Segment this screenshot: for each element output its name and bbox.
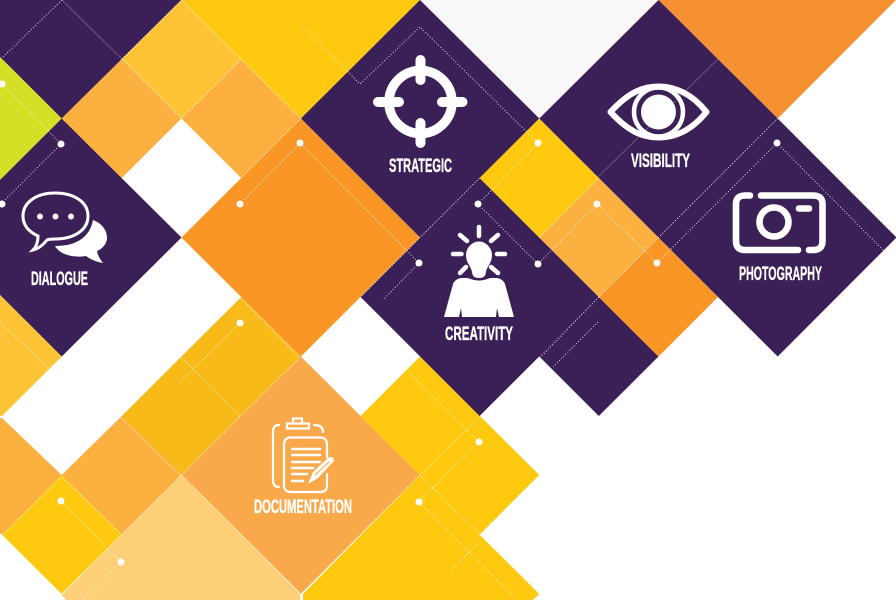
panel: lime diamond	[0, 57, 62, 180]
panel: left yellow	[0, 295, 62, 416]
panel: amber diamond left	[62, 59, 182, 178]
panel: light yellow diamond	[122, 0, 241, 118]
panel: top left purple	[0, 0, 182, 118]
panel: top yellow band	[182, 0, 420, 118]
label: creativity: CREATIVITY	[445, 324, 513, 345]
panel: pale top band	[420, 0, 658, 118]
icon: person with light bulb	[444, 227, 514, 317]
icon: camera	[736, 196, 822, 250]
panel: large orange diamond	[182, 118, 420, 356]
panel: top right orange	[658, 0, 896, 118]
panel: dark yellow band	[122, 297, 301, 475]
label: strategic: STRATEGIC	[389, 156, 452, 177]
panel: lower right yellow	[303, 356, 539, 600]
icon: target	[378, 60, 462, 143]
icon: speech bubbles	[23, 193, 107, 263]
panel: small purple diamond	[539, 297, 658, 416]
panel: photography	[658, 118, 896, 356]
icon: eye	[610, 86, 706, 138]
panel: creativity	[361, 178, 599, 416]
panel: orange diamond centre	[599, 238, 718, 356]
panel: amber diamond right	[182, 59, 301, 178]
label: visibility: VISIBILITY	[631, 151, 690, 172]
label: documentation: DOCUMENTATION	[254, 497, 352, 518]
panel: dialogue	[0, 118, 182, 356]
panel: documentation	[182, 356, 420, 594]
icon: clipboard and pencil	[273, 418, 334, 492]
panel: left amber	[0, 418, 62, 535]
label: photography: PHOTOGRAPHY	[739, 264, 822, 285]
panel: visibility	[539, 0, 778, 238]
panel: amber diamond centre	[539, 178, 658, 297]
connector dots	[0, 80, 780, 566]
panel: pale orange triangle	[62, 475, 300, 600]
panel: small yellow diamond	[2, 475, 122, 594]
label: dialogue: DIALOGUE	[31, 269, 88, 290]
panel: yellow diamond centre	[480, 118, 599, 238]
panel: amber diamond lower	[62, 416, 182, 535]
panel: strategic	[301, 0, 539, 238]
